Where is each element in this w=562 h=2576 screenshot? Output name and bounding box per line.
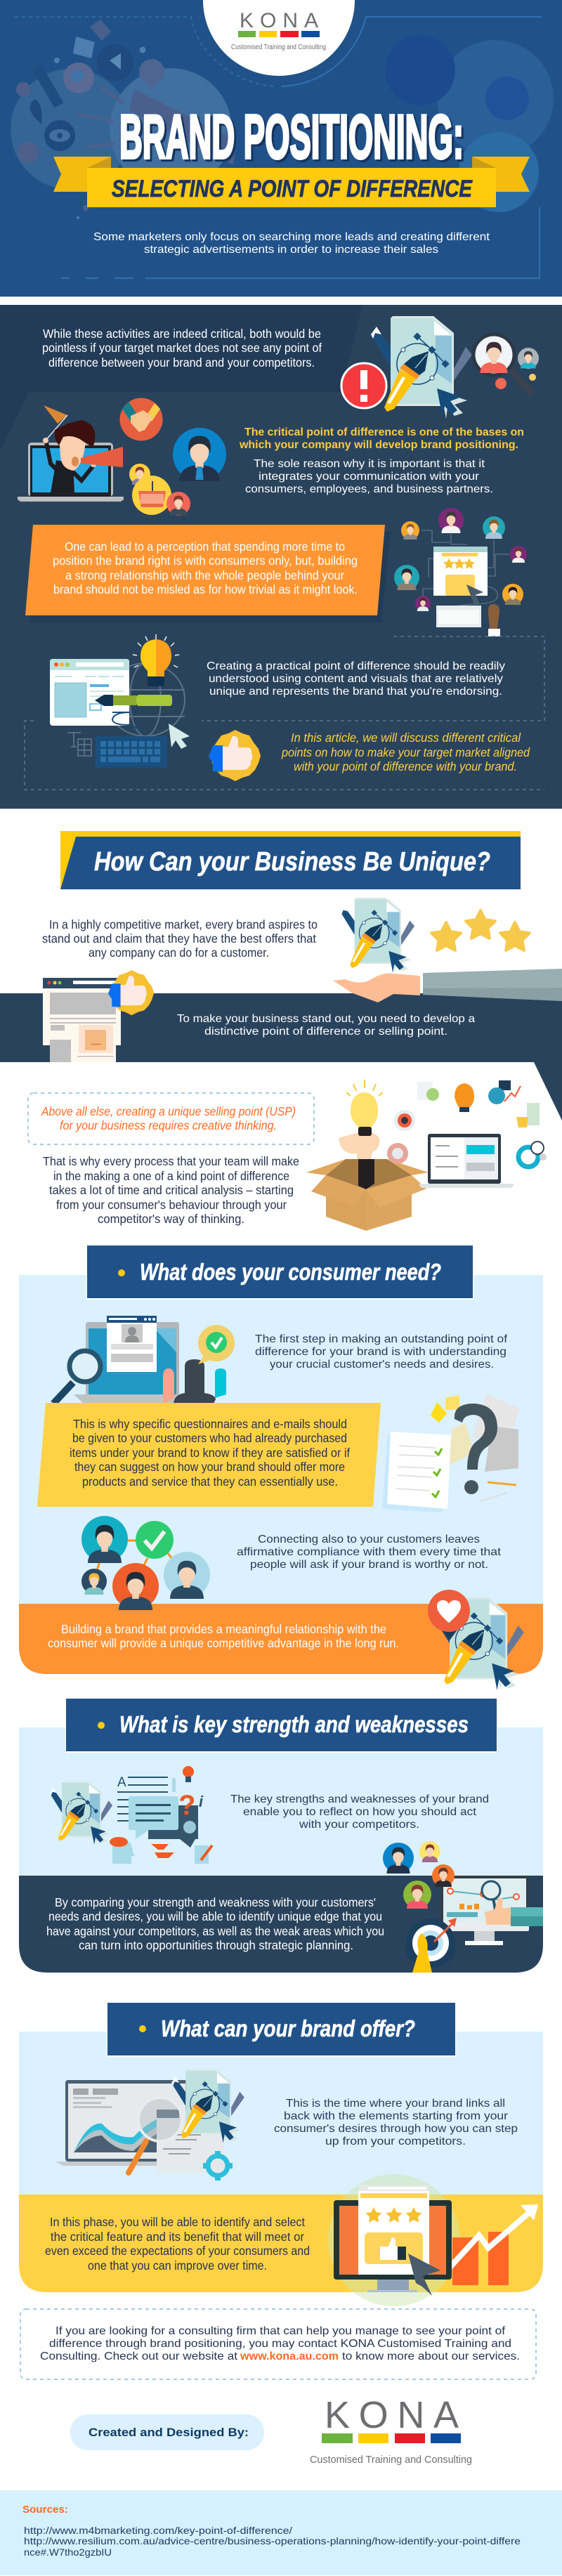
illustration: connected people network (81, 1516, 210, 1610)
panel: dark intro section (0, 305, 562, 809)
text: in this phase: even exceed the expectations of your consumers and (45, 2244, 310, 2258)
panel: sources: Sources: (22, 2504, 68, 2516)
illustration: idea box with laptop and icons (306, 1080, 547, 1231)
icon: pen document with heart (428, 1590, 524, 1691)
pill: created and designed by: Created and Designed By: (89, 2426, 249, 2439)
text: critical point of difference: integrates your communication with your (259, 471, 480, 483)
text: make your business stand out (177, 1013, 475, 1038)
heading: consumer need: What does your consumer need? (140, 1259, 441, 1285)
text: creating practical point of difference: understood using content and visuals that are relatively (209, 673, 503, 685)
logo: KONA header badge (203, 0, 355, 76)
text: every process: That is why every process that your team will make (43, 1154, 299, 1168)
text: while these activities: difference between your brand and your competitors. (48, 355, 315, 370)
callout: questionnaires yellow box: This is why specific questionnaires and e-mails should (73, 1417, 347, 1431)
text: in this article: with your point of difference with your brand. (294, 759, 517, 773)
heading: How Can your Business Be Unique (60, 831, 521, 889)
illustration: tablet rating and growth chart (328, 2174, 538, 2306)
text: critical point of difference (239, 426, 524, 495)
panel: sources: http://www.resilium.com.au/advice-centre/business-operations-planning/how-identify-your-point-differe (24, 2535, 521, 2546)
panel: sources: nce#.W7tho2gzbIU (24, 2546, 112, 2558)
heading: key strength (65, 1698, 497, 1753)
intro text (93, 231, 490, 256)
illustration: connected people around web page (394, 508, 527, 636)
illustration: chat bubbles and ideas (110, 1760, 212, 1864)
panel: sources (0, 2490, 562, 2575)
text: in this phase (45, 2215, 310, 2273)
text: building a brand (48, 1622, 399, 1650)
text: connecting to customers (237, 1534, 502, 1571)
text: connecting to customers: affirmative compliance with them every time that (237, 1546, 502, 1558)
text: creating practical point of difference: Creating a practical point of difference should be readily (207, 660, 505, 672)
text: every process: takes a lot of time and critical analysis – starting (49, 1183, 294, 1197)
callout: orange box: One can lead to a perception that spending more time to (65, 540, 345, 554)
panel: what can your brand offer (19, 2032, 543, 2292)
logo: KONA footer: KONA (325, 2394, 459, 2436)
callout: contact dashed box: If you are looking for a consulting firm that can help you manage to see your point of (55, 2325, 506, 2337)
illustration: laptop analytics with magnifier and gear (55, 2070, 244, 2181)
text: comparing strength: needs and desires, you will be able to identify unique edge that you (48, 1909, 382, 1923)
text: highly competitive market: stand out and claim that they have the best offers that (42, 931, 316, 946)
text: while these activities: While these activities are indeed critical, both would be (43, 327, 321, 341)
text: first step: your crucial customer's needs and desires. (270, 1359, 494, 1371)
text: in this phase: In this phase, you will be able to identify and select (50, 2215, 305, 2229)
icon: pen document with alert and magnifier (341, 316, 539, 419)
text: critical point of difference: consumers, employees, and business partners. (245, 483, 493, 495)
band: stand out dark band (0, 993, 562, 1120)
illustration: laptop profile and magnifier (53, 1316, 235, 1404)
text: comparing strength: have against your competitors, as well as the weak areas which you (46, 1924, 384, 1938)
callout: USP dashed box: for your business requires creative thinking. (60, 1118, 277, 1132)
text: every process: in the making a one of a kind point of difference (53, 1169, 289, 1183)
illustration: chat bubbles and ideas: i (199, 1793, 204, 1810)
logo: KONA header badge: Customised Training and Consulting (231, 44, 326, 51)
text: first step: The first step in making an outstanding point of (255, 1333, 508, 1345)
icon: three stars (431, 910, 530, 950)
text: key strengths (230, 1793, 489, 1831)
pill: created and designed by (70, 2414, 264, 2450)
text: creating practical point of difference: unique and represents the brand that you're endorsing. (209, 686, 502, 698)
text: while these activities (42, 327, 322, 370)
illustration: monitor target avatars (383, 1841, 543, 1973)
text: brand links: consumer's desires through how you can step (274, 2123, 518, 2135)
text: key strengths: enable you to reflect on how you should act (243, 1806, 477, 1818)
text: in this phase: one that you can improve over time. (88, 2258, 267, 2273)
text: building a brand: Building a brand that provides a meaningful relationship with the (61, 1622, 386, 1636)
text: first step (255, 1333, 508, 1371)
callout: questionnaires yellow box (37, 1403, 381, 1507)
avatars with basket (129, 464, 190, 516)
panel: sources: http://www.m4bmarketing.com/key-point-of-difference/ (24, 2525, 292, 2536)
callout: contact dashed box: to know more about our services. (342, 2351, 520, 2362)
text: brand links: up from your competitors. (325, 2136, 466, 2147)
text: key strengths: with your competitors. (299, 1819, 419, 1831)
text: connecting to customers: people will ask if your brand is worthy or not. (250, 1559, 488, 1571)
heading: key strength: What is key strength and weaknesses (119, 1711, 469, 1737)
text: brand links: This is the time where your brand links all (286, 2098, 505, 2110)
text: building a brand: consumer will provide a unique competitive advantage in the long run. (48, 1636, 399, 1650)
heading: consumer need (86, 1245, 473, 1300)
callout: contact dashed box: difference through brand positioning, you may contact KONA Customised Training and (49, 2338, 511, 2350)
callout: questionnaires yellow box: be given to your customers who had already purchased (72, 1431, 347, 1445)
callout: orange box: a strong relationship with the whole people behind your (65, 568, 344, 582)
text: make your business stand out: distinctive point of difference or selling point. (204, 1026, 447, 1038)
callout: questionnaires yellow box: items under your brand to know if they are satisfied or if (70, 1446, 350, 1460)
marketing icon cluster left (11, 20, 237, 219)
illustration: chat bubbles and ideas: ? (178, 1790, 195, 1821)
icon: pen document (340, 898, 414, 973)
text: highly competitive market: In a highly competitive market, every brand aspires to (49, 917, 318, 931)
panel: consumer need (19, 1275, 543, 1674)
text: comparing strength (46, 1895, 384, 1952)
text: make your business stand out: To make your business stand out, you need to develop a (177, 1013, 475, 1025)
callout: contact dashed box: www.kona.au.com (240, 2351, 339, 2362)
text: highly competitive market (42, 917, 318, 960)
logo: KONA footer (310, 2394, 472, 2466)
avatar: businessman (173, 428, 226, 481)
text: every process: from your consumer's behaviour through your (56, 1198, 287, 1212)
icon: handshake circle (119, 398, 163, 441)
text: in this phase: the critical feature and its benefit that will meet or (51, 2230, 304, 2244)
text: key strengths: The key strengths and weaknesses of your brand (230, 1793, 489, 1805)
heading: How Can your Business Be Unique: How Can your Business Be Unique? (94, 847, 490, 877)
text: critical point of difference: The sole reason why it is important is that it (254, 458, 485, 470)
decorative circles right (385, 35, 554, 212)
text: comparing strength: can turn into opportunities through strategic planning. (79, 1938, 353, 1952)
text: in this article (281, 731, 530, 773)
callout: orange box (25, 525, 391, 622)
ribbon subtitle (53, 157, 530, 207)
panel: strengths and weaknesses (19, 1727, 543, 1973)
icon: pen document small (50, 1781, 112, 1845)
panel: header background (0, 0, 562, 297)
text: every process: competitor's way of thinking. (98, 1212, 244, 1226)
heading: brand offer: What can your brand offer? (161, 2015, 415, 2041)
text: critical point of difference: The critical point of difference is one of the bases on (244, 426, 524, 438)
callout: contact dashed box (20, 2309, 536, 2379)
text: critical point of difference: which your company will develop brand positioning. (239, 439, 518, 451)
icon: thumbs up badge (209, 730, 261, 781)
text: first step: difference for your brand is with understanding (255, 1346, 507, 1358)
text: comparing strength: By comparing your strength and weakness with your customers' (55, 1895, 376, 1909)
text: connecting to customers: Connecting also to your customers leaves (258, 1534, 480, 1545)
heading: brand offer (107, 2002, 456, 2057)
illustration: hand and sleeve (333, 969, 562, 1002)
illustration: man on laptop with megaphone (18, 405, 124, 502)
text: every process (43, 1154, 299, 1226)
callout: orange box: brand should not be misled as for how trivial as it might look. (53, 582, 358, 596)
illustration: question mark and checklist (382, 1394, 520, 1512)
logo: KONA footer: Customised Training and Consulting (310, 2454, 472, 2466)
text: creating practical point of difference (207, 660, 505, 698)
illustration: browser with thumbs up (43, 970, 154, 1062)
small marketing icons (387, 1080, 547, 1167)
intro text: Some marketers only focus on searching more leads and creating different (93, 231, 490, 243)
text: brand links (274, 2098, 518, 2147)
text: while these activities: pointless if your target market does not see any point of (42, 341, 322, 355)
callout: questionnaires yellow box: they can suggest on how your brand should offer more (74, 1460, 345, 1474)
text: highly competitive market: any company can do for a customer. (89, 946, 269, 960)
ribbon subtitle: SELECTING A POINT OF DIFFERENCE (112, 176, 473, 202)
callout: contact dashed box: Consulting. Check out our website at (40, 2351, 238, 2362)
callout: questionnaires yellow box: products and service that they can essentially use. (82, 1475, 338, 1489)
text: brand links: back with the elements starting from your (284, 2110, 509, 2122)
callout: USP dashed box: Above all else, creating a unique selling point (USP) (41, 1104, 296, 1118)
text: in this article: points on how to make your target market aligned (281, 745, 530, 759)
text: in this article: In this article, we will discuss different critical (291, 731, 521, 745)
callout: orange box: position the brand right is with consumers only, but, building (53, 554, 358, 568)
intro text: strategic advertisements in order to increase their sales (144, 244, 438, 256)
illustration: chat bubbles and ideas: A (117, 1775, 126, 1790)
illustration: bulb browser pen keyboard (50, 634, 190, 768)
callout: USP dashed box (28, 1093, 314, 1144)
logo: KONA header badge: KONA (240, 9, 318, 32)
decorative dashed frames (25, 636, 544, 790)
